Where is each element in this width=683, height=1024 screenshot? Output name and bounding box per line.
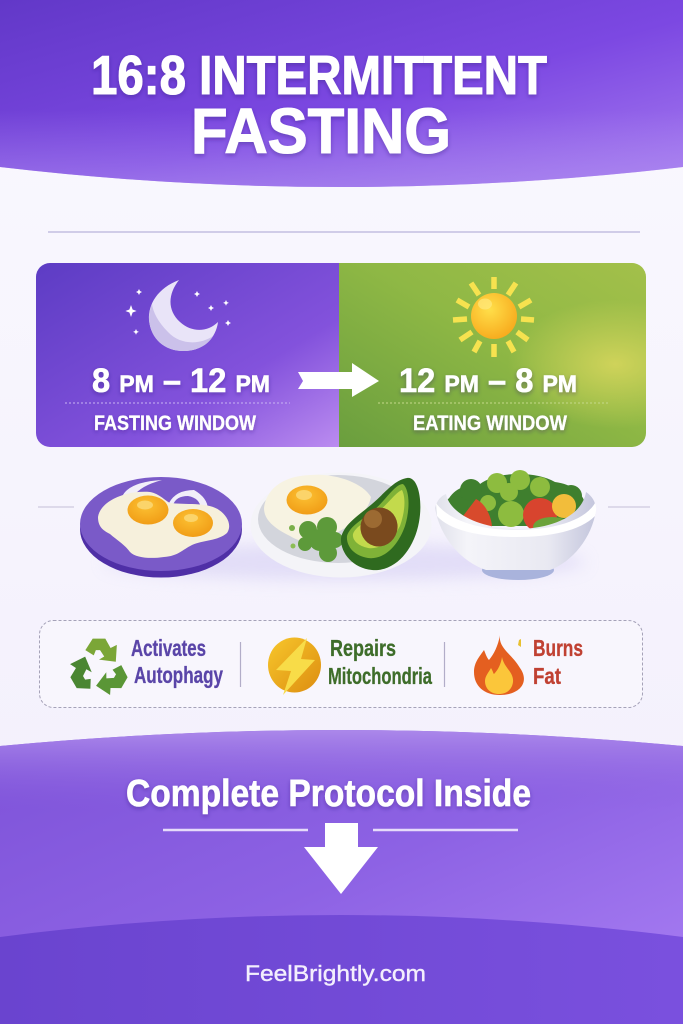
benefit: activates autophagy: Activates <box>131 635 206 661</box>
fasting hours: 8 PM – 12 PM <box>92 362 270 400</box>
eating hours: 12 PM – 8 PM <box>399 362 577 400</box>
benefit: repairs mitochondria: Repairs <box>330 635 396 661</box>
title <box>91 44 547 167</box>
call to action: Complete Protocol Inside <box>126 773 531 815</box>
icon: recycle arrows <box>65 639 131 698</box>
benefit: activates autophagy <box>131 635 223 688</box>
benefit: repairs mitochondria <box>328 635 432 689</box>
fasting label: FASTING WINDOW <box>94 412 256 435</box>
benefit: burns fat <box>533 635 583 689</box>
title: 16:8 INTERMITTENT <box>91 44 547 106</box>
icon: flame <box>474 635 524 695</box>
footer strip <box>0 915 683 1024</box>
icon: eggs on purple plate <box>80 477 242 578</box>
icon: salad bowl <box>435 470 596 580</box>
arrow: down <box>304 823 378 894</box>
benefit: burns fat: Burns <box>533 635 583 661</box>
panel: fasting and eating windows <box>36 263 646 447</box>
benefit: repairs mitochondria: Mitochondria <box>328 663 432 689</box>
benefit: activates autophagy: Autophagy <box>134 662 223 688</box>
panel: benefits <box>40 620 642 708</box>
icon: sun <box>453 277 534 357</box>
eating label: EATING WINDOW <box>413 412 567 435</box>
panel: fasting window <box>36 263 339 447</box>
arrow: fasting to eating <box>298 363 379 397</box>
benefit: burns fat: Fat <box>533 663 561 689</box>
header banner <box>0 0 683 187</box>
footer banner <box>0 730 683 1024</box>
icon: plate with egg and avocado <box>250 472 432 578</box>
icon: moon and stars <box>125 280 231 351</box>
food illustrations <box>80 470 596 580</box>
website: FeelBrightly.com <box>245 961 426 986</box>
title: FASTING <box>191 95 451 167</box>
icon: lightning bolt <box>268 638 321 695</box>
panel: eating window <box>339 263 646 447</box>
